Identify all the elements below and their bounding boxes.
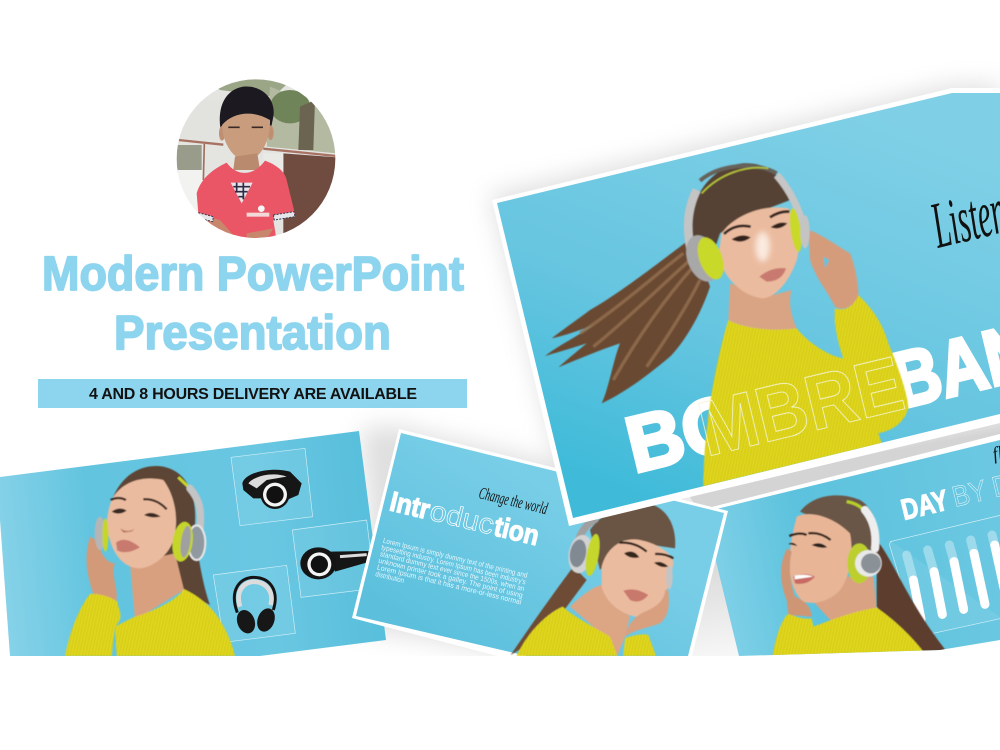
title: Modern PowerPoint [42,248,464,301]
product card: headphones right [292,520,375,597]
title [42,248,464,360]
body text [375,536,528,606]
panel: right slide [690,423,1000,660]
script tagline: Change the world [477,483,550,518]
bar chart [890,515,1000,634]
panel: center slide [352,429,728,660]
figure: hero woman with ponytail [545,163,908,487]
figure: woman with headphones [65,466,235,656]
title: Presentation [114,307,391,360]
heading: day by day: DAY [898,485,951,527]
body text: standard dummy text ever since the 1500s, when an [379,549,525,593]
heading: introduction [389,491,538,546]
body text: distribution [375,569,405,585]
figure: woman looking back [511,504,675,656]
heading: brand filled letters: BO [618,376,752,489]
body text: unknown printer took a galley. The point of using [378,556,524,600]
product card: headphones bottom [213,565,295,642]
heading: day by day [900,476,1000,520]
delivery banner [38,379,467,408]
avatar photo [173,77,340,243]
body text: Lorem Ipsum is simply dummy text of the printing and [382,536,528,580]
body text: typesetting industry. Lorem Ipsum has been industry's [381,543,527,586]
boy [220,86,274,128]
delivery banner: 4 AND 8 HOURS DELIVERY ARE AVAILABLE [89,386,417,403]
heading: introduction: tion [491,511,542,551]
body text: Lorem Ipsum is that it has a more-or-less normal [376,563,523,606]
panel: main hero slide [492,88,1000,526]
product card: headphones top [231,448,313,526]
drop shadows [345,85,1000,690]
figure: woman smiling [773,495,945,656]
heading: brand outlined letters: MBRE [690,339,912,473]
panel: left slide [0,431,386,656]
heading: introduction: oduc [427,495,497,540]
heading: brand filled letters [624,328,1000,474]
heading: introduction: Intr [387,486,433,525]
